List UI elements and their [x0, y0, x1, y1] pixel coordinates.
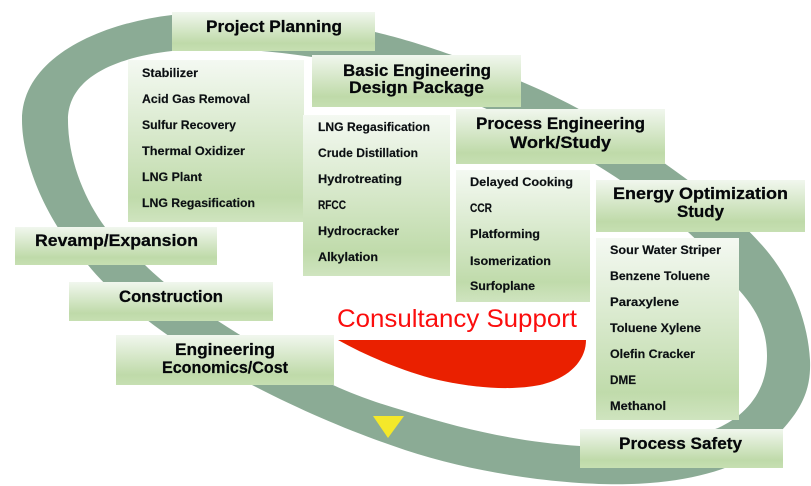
heading: construction: [69, 282, 273, 321]
heading: basic engineering design package: Design Package: [349, 79, 484, 97]
heading: engineering economics/cost: Economics/Cost: [162, 359, 288, 377]
panel: project types list 2: Crude Distillation: [318, 148, 418, 160]
panel: project types list 3: Surfoplane: [470, 281, 535, 293]
panel: project types list 2: Hydrocracker: [318, 226, 400, 238]
heading: process engineering work/study: [456, 109, 665, 164]
panel: project types list 1: LNG Regasification: [142, 198, 255, 210]
icon: yellow direction triangle: [373, 416, 404, 438]
heading: process engineering work/study: Process Engineering: [476, 115, 645, 133]
panel: project types list 4: Methanol: [610, 401, 666, 413]
panel: project types list 2: [303, 115, 450, 276]
heading: engineering economics/cost: Engineering: [175, 341, 275, 359]
panel: project types list 3: [456, 170, 590, 302]
panel: project types list 3: CCR: [470, 203, 493, 215]
panel: project types list 3: Platforming: [470, 229, 540, 241]
panel: project types list 4: [596, 238, 739, 420]
panel: project types list 4: DME: [610, 375, 636, 387]
heading: basic engineering design package: [312, 55, 521, 107]
panel: project types list 3: Delayed Cooking: [470, 177, 573, 189]
panel: project types list 4: Sour Water Striper: [610, 245, 722, 257]
panel: project types list 4: Toluene Xylene: [610, 323, 701, 335]
panel: project types list 4: Olefin Cracker: [610, 349, 696, 361]
heading: project planning: Project Planning: [206, 18, 342, 36]
heading: energy optimization study: Energy Optimization: [613, 185, 788, 203]
heading: energy optimization study: [596, 180, 805, 232]
heading: revamp/expansion: [15, 227, 217, 265]
heading: revamp/expansion: Revamp/Expansion: [35, 232, 198, 250]
heading: construction: Construction: [119, 288, 223, 306]
consultancy support heading: Consultancy Support: [337, 305, 577, 333]
heading: project planning: [172, 12, 375, 51]
panel: project types list 3: Isomerization: [470, 256, 551, 268]
heading: energy optimization study: Study: [677, 203, 725, 221]
panel: project types list 1: Sulfur Recovery: [142, 120, 237, 132]
panel: project types list 1: LNG Plant: [142, 172, 202, 184]
heading: process engineering work/study: Work/Study: [510, 134, 612, 152]
panel: project types list 1: Thermal Oxidizer: [142, 146, 246, 158]
panel: project types list 4: Benzene Toluene: [610, 271, 710, 283]
heading: process safety: Process Safety: [619, 435, 743, 453]
panel: project types list 2: Alkylation: [318, 252, 378, 264]
panel: project types list 2: LNG Regasification: [318, 122, 430, 134]
panel: project types list 2: RFCC: [318, 200, 346, 212]
panel: project types list 2: Hydrotreating: [318, 174, 402, 186]
heading: basic engineering design package: Basic Engineering: [343, 62, 491, 80]
panel: project types list 1: [128, 60, 304, 222]
panel: project types list 1: Acid Gas Removal: [142, 94, 250, 106]
heading: process safety: [580, 429, 783, 468]
panel: project types list 4: Paraxylene: [610, 297, 679, 309]
heading: engineering economics/cost: [116, 335, 334, 385]
red dome shape: [338, 340, 586, 388]
panel: project types list 1: Stabilizer: [142, 68, 199, 80]
